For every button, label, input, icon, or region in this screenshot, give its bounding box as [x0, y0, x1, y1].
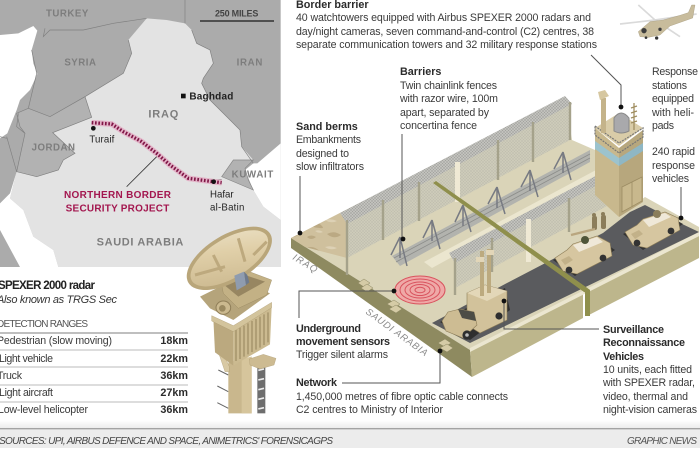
scale bar [200, 9, 274, 22]
callout: barriers: apart, separated by [400, 107, 490, 119]
callout: border barrier [296, 0, 597, 51]
label: Jordan: JORDAN [32, 143, 75, 154]
callout: network: 1,450,000 metres of fibre optic cable connects [296, 391, 508, 403]
table: detection ranges [0, 319, 188, 416]
callout: sand berms: Sand berms [296, 121, 358, 133]
road [432, 205, 699, 343]
callout: response stations [651, 66, 698, 185]
callout: sand berms [296, 121, 364, 173]
label: Kuwait: KUWAIT [232, 169, 273, 180]
country: Kuwait [222, 160, 253, 190]
callout: surveillance vehicles: Reconnaissance [603, 337, 685, 349]
sea: Mediterranean [0, 26, 37, 138]
label: Iran: IRAN [237, 58, 262, 69]
icon: helicopter [620, 5, 697, 40]
callout: surveillance vehicles: with SPEXER radar, [602, 377, 695, 389]
callout: network: C2 centres to Ministry of Interior [296, 404, 443, 416]
table: detection ranges: Light aircraft [0, 387, 53, 399]
leader: barriers [401, 134, 405, 241]
olive stripe [433, 181, 590, 316]
footer: SOURCES: UPI, AIRBUS DEFENCE AND SPACE, ANIMETRICS' FORENSICAGPS [0, 436, 333, 447]
leader: surveillance vehicles [502, 299, 599, 329]
ground surface [291, 98, 699, 350]
callout: sand berms: Embankments [296, 134, 361, 146]
sea: Red Sea [0, 172, 58, 267]
sensors on wall [358, 279, 453, 352]
callout: underground sensors: Underground [296, 323, 361, 335]
far wall section [587, 236, 699, 316]
callout: underground sensors: Trigger silent alarms [296, 349, 388, 361]
callout: sand berms: slow infiltrators [296, 161, 364, 173]
leader: sand berms [298, 176, 302, 235]
callout: network [296, 377, 508, 416]
callout: sand berms: designed to [296, 148, 349, 160]
callout: border barrier: day/night cameras, seven command-and-control (C2) centres, 38 [296, 26, 594, 38]
table: detection ranges: 22km [160, 353, 188, 365]
callout: barriers: concertina fence [400, 120, 477, 132]
label: wall SAUDI ARABIA: SAUDI ARABIA [363, 307, 430, 359]
callout: response stations: response [652, 160, 695, 172]
tower [595, 90, 643, 217]
borders [0, 0, 253, 180]
leader: response vehicles [679, 187, 683, 220]
leader: border barrier [591, 55, 623, 109]
label: Northern Border Security Project: SECURITY PROJECT [66, 203, 169, 214]
vehicle: humvee rear [623, 210, 683, 250]
heading: SPEXER radar: SPEXER 2000 radar [0, 280, 96, 292]
callout: underground sensors: movement sensors [296, 336, 390, 348]
panel: border barrier illustration [290, 90, 699, 377]
country: Jordan [17, 97, 92, 177]
project route [92, 123, 222, 183]
label: Northern Border Security Project: NORTHERN BORDER [64, 190, 171, 201]
sea: Persian Gulf [245, 143, 281, 220]
label: Syria: SYRIA [64, 58, 96, 69]
sand berm [291, 98, 572, 258]
scale bar: 250 MILES [215, 9, 258, 19]
table: detection ranges: 27km [160, 387, 188, 399]
table: detection ranges: Light vehicle [0, 353, 53, 365]
footer [0, 420, 700, 448]
vehicle: surveillance truck [440, 249, 510, 340]
callout: surveillance vehicles: Vehicles [603, 351, 644, 363]
marker: Hafar al-Batin: Hafar [210, 189, 234, 200]
illustration: radar unit [176, 214, 282, 413]
callout: surveillance vehicles: 10 units, each fitted [603, 364, 692, 376]
marker: Hafar al-Batin [210, 179, 244, 213]
label: Iraq: IRAQ [148, 109, 179, 121]
table: detection ranges: Pedestrian (slow moving) [0, 335, 112, 347]
callout: network: Network [296, 377, 338, 389]
callout: surveillance vehicles [602, 324, 697, 416]
callout: response stations: pads [652, 120, 674, 132]
leader: network [342, 349, 442, 383]
icon: radome [614, 113, 629, 133]
marker: Hafar al-Batin: al-Batin [210, 202, 244, 213]
table: detection ranges: 18km [160, 335, 188, 347]
callout: response stations: stations [652, 80, 687, 92]
callout: response stations: with heli- [651, 107, 694, 119]
callout: response stations: vehicles [652, 173, 689, 185]
callout: response stations: equipped [652, 93, 694, 105]
label: wall IRAQ: IRAQ [290, 252, 320, 276]
label: Turkey: TURKEY [46, 9, 89, 20]
marker: Turaif: Turaif [89, 135, 115, 146]
label: Saudi Arabia: SAUDI ARABIA [97, 237, 183, 249]
callout: barriers: with razor wire, 100m [399, 93, 498, 105]
right wall section [470, 293, 583, 377]
marker: Baghdad: Baghdad [189, 91, 233, 102]
icon: sensor alarm rings [395, 276, 445, 304]
label: Northern Border Security Project [64, 190, 171, 214]
antenna mast [601, 98, 606, 133]
vehicle: humvee front [553, 229, 615, 276]
Iraq and Saudi Arabia land [10, 18, 281, 267]
heading: SPEXER radar [0, 280, 118, 306]
callout: response stations: Response [652, 66, 698, 78]
callout: barriers [399, 66, 498, 132]
soldiers [592, 212, 606, 230]
leader: underground sensors [299, 289, 396, 318]
table: detection ranges: 36km [160, 370, 188, 382]
callout: response stations: 240 rapid [652, 146, 695, 158]
leader: project [127, 157, 157, 187]
concertina fence [391, 150, 590, 266]
callout: surveillance vehicles: video, thermal and [603, 391, 688, 403]
callout: barriers: Twin chainlink fences [400, 80, 497, 92]
callout: surveillance vehicles: Surveillance [603, 324, 664, 336]
callout: surveillance vehicles: night-vision cameras [603, 404, 697, 416]
callout: border barrier: 40 watchtowers equipped with Airbus SPEXER 2000 radars and [296, 12, 591, 24]
heading: SPEXER radar: Also known as TRGS Sec [0, 294, 118, 306]
table: detection ranges: 36km [160, 404, 188, 416]
front fence [449, 171, 610, 295]
marker: Turaif [89, 126, 115, 146]
rear fence [340, 96, 572, 275]
left wall [291, 238, 472, 377]
table: detection ranges: Low-level helicopter [0, 404, 88, 416]
callout: underground sensors [296, 323, 390, 361]
footer: GRAPHIC NEWS [627, 436, 697, 447]
panel: locator map [0, 0, 281, 267]
callout: barriers: Barriers [400, 66, 441, 78]
callout: border barrier: separate communication towers and 32 military response stations [296, 39, 597, 51]
